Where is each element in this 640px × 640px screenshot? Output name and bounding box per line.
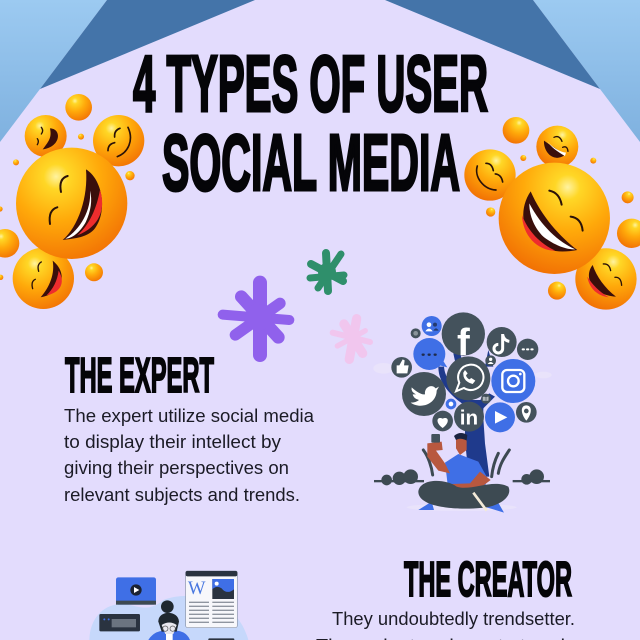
icon: facebook [442,312,485,364]
emoji cluster: left [0,94,144,309]
text block: the expert: relevant subjects and trends. [64,484,300,505]
star: green [310,253,344,291]
video card [116,577,156,605]
icon: tiktok [487,327,517,357]
woman [148,600,190,640]
icon: instagram [491,359,535,403]
icon: contacts [422,316,442,336]
icon: linkedin [454,402,484,432]
icon: blue speech bubble [413,338,447,370]
text block: the creator [316,608,575,640]
icon: heart [432,411,453,431]
corner shape: top right [385,0,640,142]
icon: chat [517,339,538,360]
corner shape: top left [0,0,255,142]
server card [99,614,140,631]
icon: location pin [516,402,537,423]
tree trunk [438,350,495,477]
icon: twitter [402,372,446,416]
icon: small circles [446,355,496,409]
emoji cluster: right [464,117,640,310]
text block: the creator: They undoubtedly trendsetter. [332,608,575,629]
title [133,39,488,207]
text block: the expert: to display their intellect by [64,431,282,452]
illustration: social media tree [373,312,552,513]
icon: facebook: f [457,321,470,364]
icon: whatsapp [446,356,490,400]
icon: linkedin: in [460,406,478,429]
icon: small dot [411,328,421,338]
star: purple [223,283,289,355]
icon: play [485,402,515,432]
text block: the expert [64,405,315,505]
text block: the expert: giving their perspectives on [64,457,289,478]
icon: thumbs up [391,357,412,378]
text block: the expert: The expert utilize social media [64,405,315,426]
bushes [423,450,509,477]
document card [186,571,237,628]
star: pink [333,319,370,359]
document card: W [188,578,206,599]
small dark card [208,638,234,640]
text: THE EXPERT [65,349,214,403]
background blob [89,596,248,640]
illustration: content creator [89,571,248,640]
person sitting with phone [418,433,509,513]
